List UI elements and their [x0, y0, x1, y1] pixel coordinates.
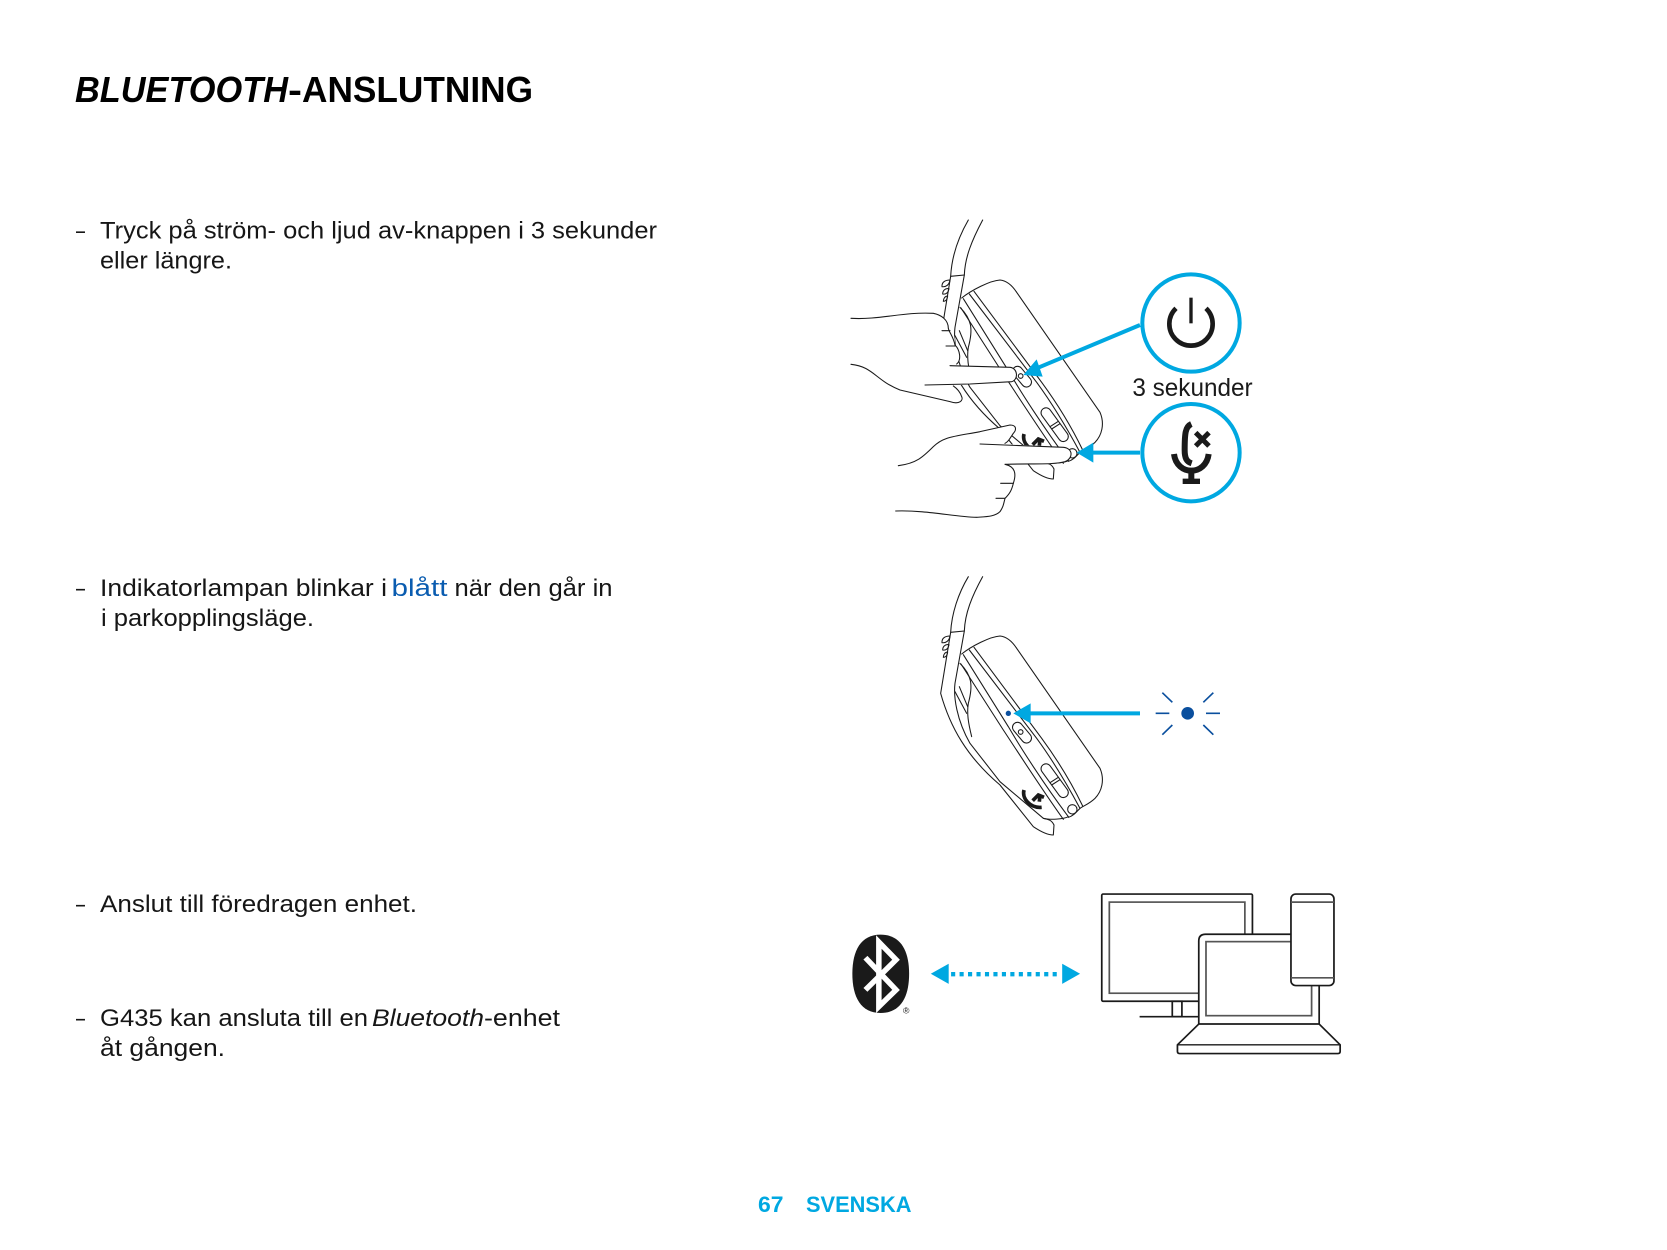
arrow to indicator — [1013, 703, 1140, 723]
icon: bluetooth logo — [852, 935, 910, 1015]
text block: step 2: i parkopplingsläge. — [101, 605, 314, 632]
text block: step 2: när den går in — [454, 575, 612, 602]
icon: bluetooth logo: ® — [903, 1005, 910, 1015]
arrow to mute button — [1077, 443, 1140, 463]
illustration: headset with blinking indicator — [941, 577, 1220, 835]
text block: step 3: – — [76, 891, 85, 918]
text block: step 4 — [76, 1005, 560, 1062]
text block: step 4: – — [76, 1005, 85, 1032]
arrow to power button — [1023, 325, 1140, 377]
text block: step 4: -enhet — [484, 1005, 560, 1032]
text block: step 1: Tryck på ström- och ljud av-knappen i 3 sekunder — [100, 218, 657, 244]
title: - — [288, 69, 302, 110]
text block: step 4: G435 kan ansluta till en — [100, 1005, 368, 1032]
text block: step 4: Bluetooth — [372, 1005, 484, 1032]
icon: laptop — [1177, 934, 1340, 1054]
title: ANSLUTNING — [302, 69, 533, 110]
upper hand — [851, 313, 1016, 403]
title: BLUETOOTH — [75, 69, 289, 110]
title — [75, 69, 533, 110]
icon: monitor — [1102, 894, 1252, 1017]
illustration: bluetooth connection — [852, 894, 1340, 1054]
footer: page number and language — [758, 1192, 912, 1217]
icon: blinking blue light — [1156, 693, 1220, 735]
text block: step 2 — [76, 575, 612, 632]
text block: step 1 — [76, 218, 657, 274]
headset — [941, 220, 1102, 479]
footer: page number and language: SVENSKA — [806, 1192, 912, 1217]
text block: step 2: blått — [392, 575, 448, 602]
double arrow — [931, 964, 1080, 984]
text block: step 2: – — [76, 575, 85, 602]
label: 3 sekunder: 3 sekunder — [1132, 374, 1253, 402]
headset — [941, 577, 1102, 835]
text block: step 3: Anslut till föredragen enhet. — [100, 891, 417, 918]
text block: step 1: eller längre. — [100, 248, 232, 274]
icon: microphone mute circle — [1142, 404, 1240, 501]
icon: power circle — [1142, 274, 1240, 372]
illustration: hands pressing headset buttons — [851, 220, 1253, 517]
icon: phone — [1291, 894, 1334, 986]
text block: step 4: åt gången. — [100, 1035, 225, 1062]
lower hand — [896, 425, 1071, 517]
footer: page number and language: 67 — [758, 1192, 784, 1217]
indicator light dot — [1006, 711, 1011, 716]
text block: step 1: – — [76, 218, 85, 244]
text block: step 2: Indikatorlampan blinkar i — [100, 575, 387, 602]
